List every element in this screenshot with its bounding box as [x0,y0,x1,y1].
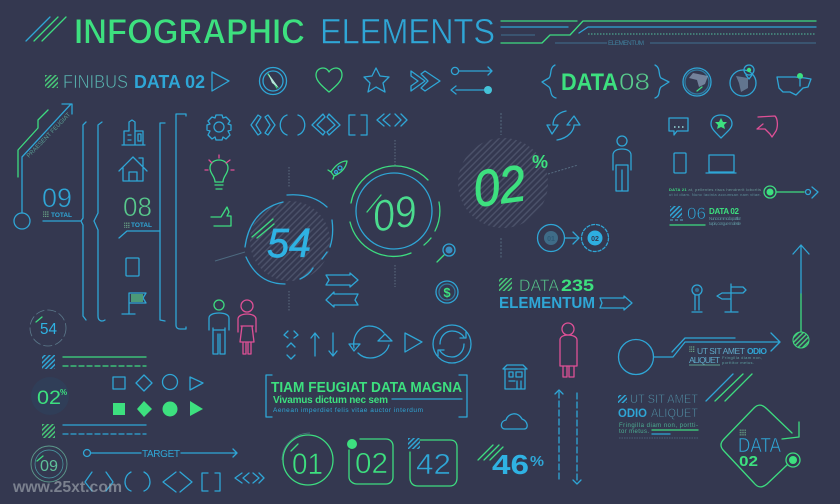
diagonal accent lines [706,374,752,401]
target arrow [84,449,237,460]
icon: lightbulb [205,155,234,189]
icon: flag [122,293,146,314]
icon: rocket [328,161,347,179]
icon: chat bubble [669,118,688,135]
icon: magnifier [437,244,455,262]
numbered box 02: 02 [355,448,388,480]
heading: data 235 elementum [499,276,632,312]
small chevrons and up down arrows [284,331,337,359]
icon: map pin star [711,115,732,138]
heading: finibus data 02: DATA 02 [134,72,205,92]
chart: circle 02 percent: % [532,152,548,172]
icon: cloud [501,414,527,429]
badge: 02 percent: 02 [37,388,61,409]
circles 01 to 02: 01 [547,236,555,243]
title: INFOGRAPHIC [74,12,305,52]
text with slider: ut id diam. Nunc lacinia accumsan nam vitae. [669,192,761,197]
numbered box 02 [347,439,393,484]
ring callout arrow: ALIQUET [689,355,720,365]
target arrow: TARGET [142,449,180,460]
icon: swap arrows [451,67,492,94]
stat: 46 percent [478,445,544,480]
title: ELEMENTS [320,12,495,52]
chart: circle 02 percent [458,113,578,258]
bracket frame [160,114,186,329]
icon: map marker [692,285,702,312]
stat: 06 data 02: turpis, congue molestie [709,221,741,226]
text with slider [669,186,818,198]
badge: diamond data 02 [721,405,800,487]
stat: 06 data 02: DATA 02 [709,207,740,216]
badge: diamond data 02: DATA [738,435,782,457]
stat: 09 total: 09 [42,183,72,213]
icon: phone [674,153,686,173]
text block: ut sit amet: Fringilla diam non, portti- [619,423,698,429]
icon: double chevron play [411,71,440,91]
icon: tablet [126,258,139,276]
header circuit lines [501,21,816,47]
icon: star [364,68,389,92]
numbered circle 01 [282,433,333,485]
badge: 02 percent [31,377,69,415]
icon: signpost [717,284,746,312]
badge: diamond data 02: 02 [739,453,758,470]
numbered box 42 [408,438,457,486]
badge: 54: 54 [40,321,57,338]
stat: 46 percent: 46 [492,449,529,480]
dashed vertical arrows [555,390,581,484]
text block: ut sit amet: UT SIT AMET [630,392,699,406]
numbered circle 01: 01 [292,448,323,481]
circles 01 to 02 [538,224,608,252]
icon: usa map with pin [777,73,811,95]
text block: ut sit amet [618,392,699,438]
ring callout arrow: Fringilla diam non, [722,355,762,360]
stat: 06 data 02: Nunc commodo porttitor [709,216,742,221]
text block: tiam feugiat: Vivamus dictum nec sem [273,395,388,406]
badge: 09: 09 [40,458,58,475]
stat: 08 total [119,192,160,238]
shapes outline and filled [113,374,203,417]
heading: data 08: 08 [619,69,650,96]
text block: ut sit amet: ODIO [618,406,647,420]
heading: finibus data 02: FINIBUS [63,72,128,92]
brace frame left [81,122,105,321]
heading: data 235 elementum: DATA [519,276,560,295]
brackets row top [251,114,407,135]
ring callout arrow [618,333,780,374]
icon: dollar coin [436,281,458,303]
text block: tiam feugiat [266,375,467,417]
ring callout arrow: ODIO [747,346,767,356]
text block: tiam feugiat: Aenean imperdiet felis vitae auctor interdum [273,407,423,414]
chart: circle 02 percent: 02 [470,154,529,218]
icon: play outline [405,333,422,352]
icon: recycle ring [433,325,471,363]
icon: person blue [613,136,631,191]
icon: thumbs up [211,207,231,226]
badge: 54 [30,310,66,346]
heading: data 08 [542,65,669,98]
icon: building [122,120,145,145]
ring callout arrow: UT SIT AMET [697,346,745,356]
heading: finibus data 02 [45,72,229,92]
ring callout arrow: porttitor metus. [722,360,754,365]
stat: 06 data 02 [670,204,742,226]
stat: 06 data 02: 06 [687,204,706,223]
icon: woman pink large [560,323,577,377]
chart: circle 54: 54 [267,220,311,266]
circuit arrow with circle: PRAESENT FEUGIAT [26,112,72,159]
chart: circle 09 [350,140,440,287]
text block: ut sit amet: ALIQUET [651,406,699,420]
icon: thumbs down pink [757,116,777,137]
icon: globe with pin [730,65,756,96]
title [26,12,495,52]
stat: 08 total: TOTAL [131,222,152,229]
couple: man and woman [209,300,256,354]
badge: 02 percent: % [60,388,67,397]
icon: store [503,365,527,389]
heading: data 08: DATA [561,69,618,96]
chart: circle 09: 09 [369,187,420,242]
numbered box 42: 42 [416,449,451,481]
brackets row bottom [85,472,264,492]
badge: 09 [31,446,67,482]
header circuit lines: ELEMENTUM [608,40,644,47]
icon: laptop [706,155,736,173]
arrows right and left [326,273,358,307]
circuit arrow with circle [14,104,72,229]
watermark: www.25xt.com [12,479,122,496]
icon: globe [683,68,711,96]
icon: house [119,157,147,181]
icon: gear [207,115,231,140]
icon: cycle arrows [349,326,392,358]
heading: data 235 elementum: 235 [561,276,594,295]
hatch and lines blue [42,424,146,438]
icon: refresh arrows [547,111,580,140]
icon: heart [316,68,342,92]
circles 01 to 02: 02 [591,236,599,243]
icon: compass clock [260,68,286,94]
icon: dollar coin: $ [443,285,451,300]
text block: tiam feugiat: TIAM FEUGIAT DATA MAGNA [271,380,462,396]
stat: 09 total: TOTAL [51,212,72,219]
text with slider: DATA 21 at, pellentes risus hendrerit lobortis [669,187,761,192]
chart: circle 54 [215,167,333,312]
text block: ut sit amet: tor metus. [619,429,649,435]
stat: 46 percent: % [530,453,544,470]
hatch and lines green [42,355,146,369]
vertical arrow with hatched ball [793,245,809,348]
stat: 09 total [42,183,80,221]
stat: 08 total: 08 [123,192,152,222]
heading: data 235 elementum: ELEMENTUM [499,295,595,312]
